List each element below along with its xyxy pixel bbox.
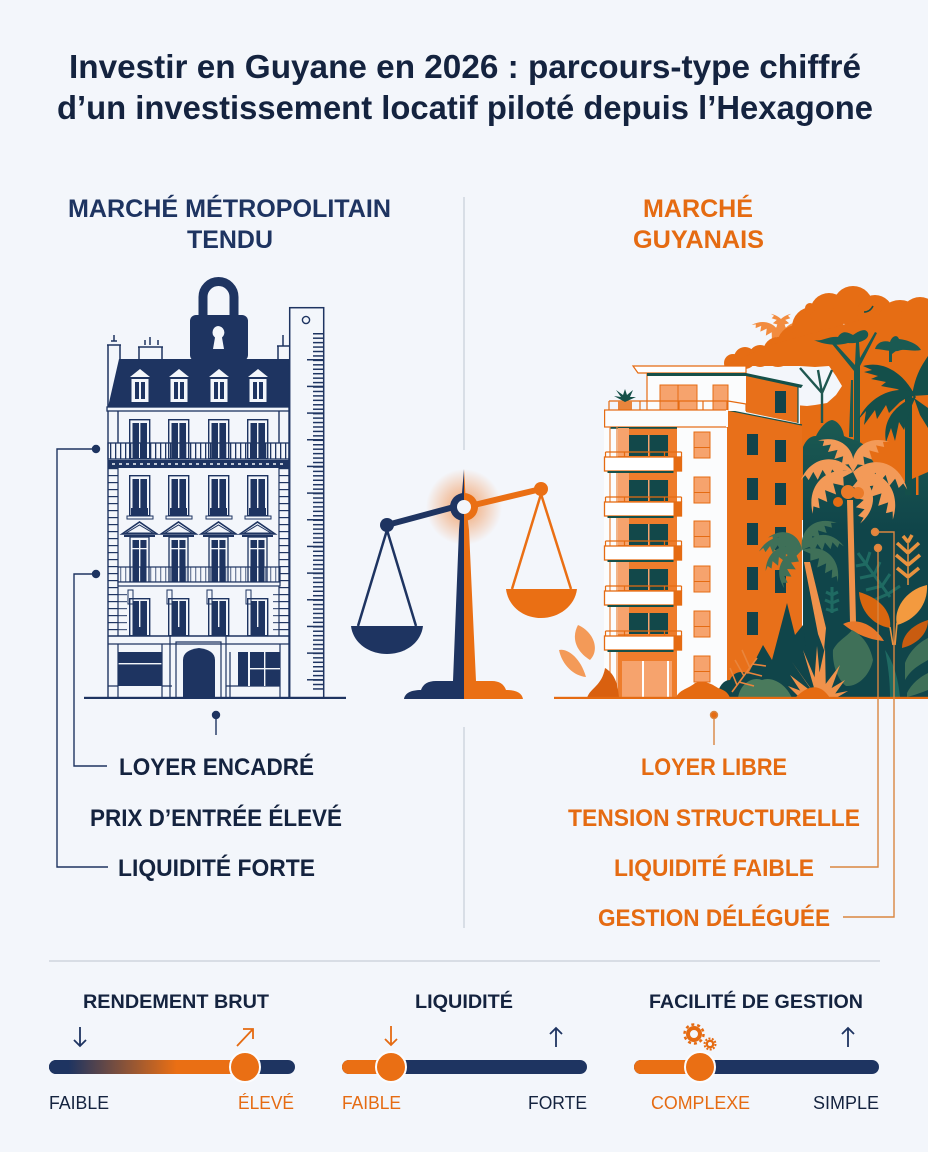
right labels: LIQUIDITÉ FAIBLE [614,854,814,882]
connector: dots to left labels [57,446,220,867]
orange side wall [727,410,802,698]
heading: marché guyanais: MARCHÉ [643,194,753,223]
upper balcony [108,443,289,459]
right labels: LOYER LIBRE [641,754,787,781]
dark tall trees [814,330,921,442]
first floor windows [127,589,273,637]
second floor windows [127,476,153,519]
left labels [90,753,342,882]
gauge: liquidité [342,990,587,1113]
right orange half [464,469,523,699]
balcony windows [618,428,668,456]
chimneys [107,335,289,408]
icon: padlock on roof [190,281,248,361]
right labels: GESTION DÉLÉGUÉE [598,904,830,932]
front side windows [694,432,710,458]
gauge: rendement brut: RENDEMENT BRUT [83,991,269,1013]
entrance [622,661,672,698]
mansard roof [108,359,289,407]
fern [730,650,766,692]
arrow down [385,1026,397,1045]
title: d’un investissement locatif piloté depuis l’Hexagone [57,89,873,126]
balcony with rail [118,567,280,582]
balconies [604,452,682,473]
apartment building [604,366,803,698]
white front [604,410,727,698]
recessed balcony wall [618,427,677,698]
slider [634,1060,879,1074]
title [57,48,873,126]
dark palm right [858,356,928,495]
arrow down [74,1027,86,1046]
potted plant [618,401,632,410]
title: Investir en Guyane en 2026 : parcours-type chiffré [69,48,861,85]
leaf at palm base [843,621,884,641]
spiky orange plant [788,646,848,698]
right labels: TENSION STRUCTURELLE [568,805,860,832]
stone courses [108,468,118,636]
gauge: facilité de gestion: FACILITÉ DE GESTION [649,990,863,1013]
ground line right [554,697,928,699]
heading: marché métropolitain tendu [68,194,391,254]
glow behind pivot [426,469,502,545]
upper storey front [647,372,746,411]
small leaves by building [559,625,619,698]
left labels: LOYER ENCADRÉ [119,753,314,781]
beams [387,507,454,525]
ruler [290,308,324,698]
connector: dots to right labels [710,528,894,917]
pediment windows [122,522,157,583]
gauge: rendement brut: ÉLEVÉ [238,1092,294,1113]
green palm [759,512,848,650]
arrow up [550,1028,562,1047]
icon: gears [684,1024,716,1050]
side wall windows [747,391,786,635]
third floor windows [130,420,150,459]
balance scale [351,469,577,699]
gauge: liquidité: FAIBLE [342,1092,401,1113]
gauge: rendement brut [49,991,295,1113]
teal ferns [825,552,900,613]
slider [342,1060,587,1074]
heading: marché guyanais: GUYANAIS [633,226,764,254]
orange palm [798,430,913,622]
ground line left [84,697,346,699]
arrow up [842,1028,854,1047]
gauge: facilité de gestion: SIMPLE [813,1092,879,1113]
dark green jungle mass [803,420,928,698]
orange fern [896,535,920,585]
dark spiky bush [730,603,812,698]
left navy half [404,469,464,699]
parisian building illustration [107,335,290,698]
gauge: facilité de gestion [634,990,879,1113]
left pan [358,530,416,626]
facade outline [108,359,289,698]
heading: marché guyanais [633,194,764,254]
left labels: LIQUIDITÉ FORTE [118,854,315,882]
terrace railing [609,401,746,411]
dormer windows [130,369,150,402]
slider [49,1060,295,1074]
right labels [568,754,860,932]
tropical leaves right [833,585,928,697]
roof slab [633,366,746,373]
gauge: rendement brut: FAIBLE [49,1092,109,1113]
gauge: liquidité: FORTE [528,1092,587,1113]
left labels: PRIX D’ENTRÉE ÉLEVÉ [90,804,342,832]
arrow up-right [237,1029,253,1046]
small pale palm on canopy [751,311,811,344]
gauge: facilité de gestion: COMPLEXE [651,1092,750,1113]
gauge: liquidité: LIQUIDITÉ [415,990,513,1013]
orange canopy [724,286,928,520]
green leaf mass [738,679,792,698]
orange bush by entrance [676,682,730,698]
right pan [512,494,571,589]
upper storey side [746,374,798,423]
heading: marché métropolitain tendu: MARCHÉ MÉTROPOLITAIN [68,194,391,223]
small dark bush [717,672,760,698]
heading: marché métropolitain tendu: TENDU [187,226,273,254]
shop fronts and door [118,652,162,686]
canopy clearing with tree [760,366,842,423]
trunk [847,500,856,622]
ground plants [676,603,848,698]
